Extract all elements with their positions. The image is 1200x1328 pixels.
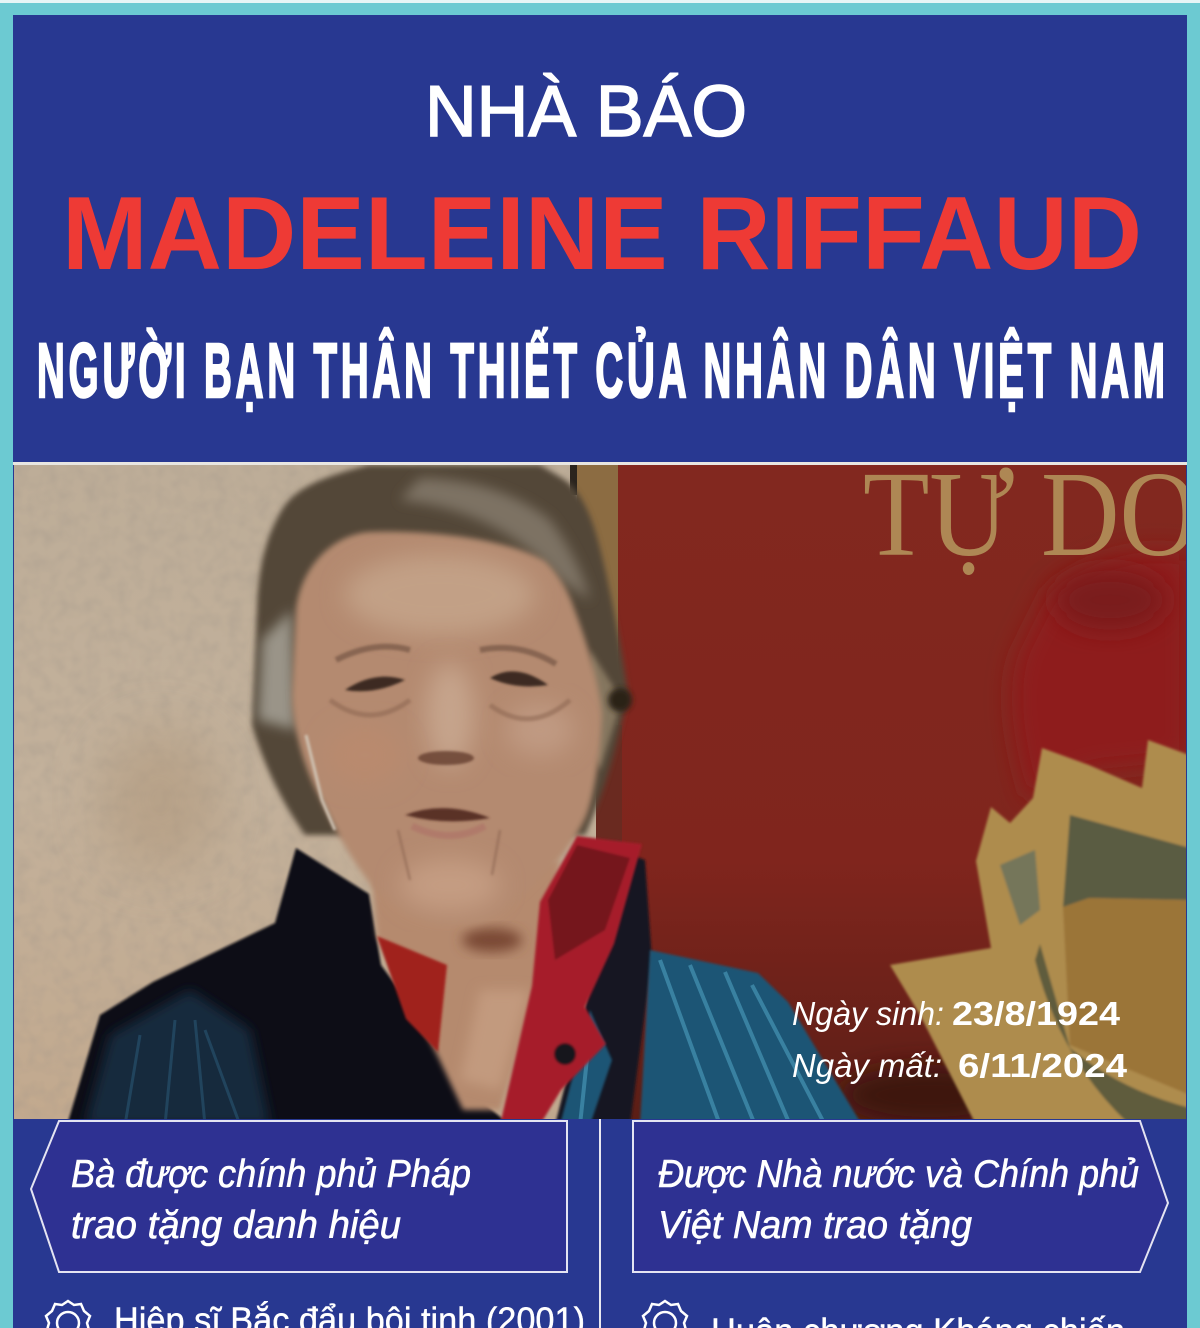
title: NHÀ BÁO: NHÀ BÁO: [425, 72, 747, 152]
wall: [14, 465, 624, 1119]
subtitle: NGƯỜI BẠN THÂN THIẾT CỦA NHÂN DÂN VIỆT NAM: [37, 327, 1165, 413]
callout: Vietnamese honours: Việt Nam trao tặng: [658, 1204, 972, 1247]
neck: [372, 860, 560, 1110]
dark hair behind collar: [555, 850, 652, 1125]
title block: [37, 72, 1165, 413]
jacket body: [67, 848, 510, 1125]
jacket right: [640, 950, 862, 1125]
panel: Vietnamese honours: [633, 1121, 1168, 1328]
hair: [252, 465, 628, 835]
red collar: [377, 836, 642, 1125]
icon: medal: [643, 1301, 687, 1328]
callout: Vietnamese honours: [633, 1121, 1168, 1272]
title: MADELEINE RIFFAUD: MADELEINE RIFFAUD: [62, 176, 1142, 292]
birth and death dates: 23/8/1924: [952, 995, 1121, 1032]
face: [292, 532, 602, 925]
callout: French honours: trao tặng danh hiệu: [71, 1204, 401, 1247]
birth and death dates: 6/11/2024: [958, 1047, 1128, 1084]
panel: French honours: [31, 1121, 585, 1328]
birth and death dates: Ngày sinh:: [792, 995, 944, 1032]
callout: Vietnamese honours: Được Nhà nước và Chính phủ: [658, 1153, 1139, 1196]
facial features: [330, 647, 570, 880]
column divider: [599, 1119, 601, 1328]
icon: medal: [46, 1301, 90, 1328]
red banner: [618, 465, 1198, 1125]
photo: portrait of Madeleine Riffaud: [13, 447, 1198, 1125]
callout: French honours: Bà được chính phủ Pháp: [71, 1153, 471, 1196]
birth and death dates: [792, 995, 1128, 1084]
birth and death dates: Ngày mất:: [792, 1047, 942, 1084]
callout: French honours: [31, 1121, 567, 1272]
lotus on banner: [890, 740, 1195, 1125]
